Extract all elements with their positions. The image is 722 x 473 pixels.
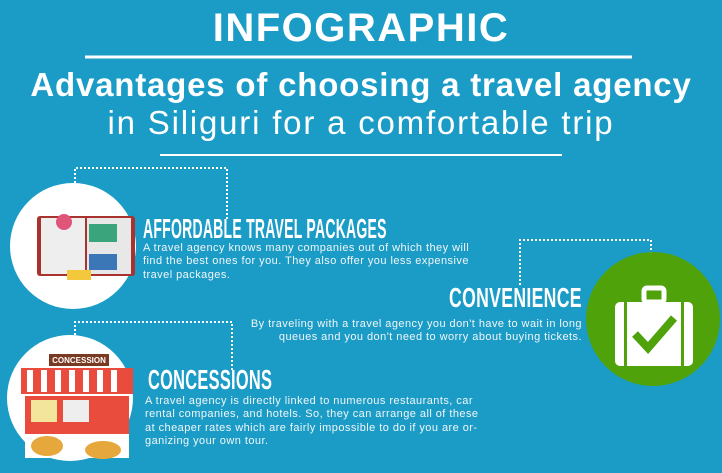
text: affordable: A travel agency knows many companies out of which they will	[143, 242, 469, 254]
text: convenience: By traveling with a travel agency you don't have to wait in long	[251, 318, 582, 330]
subtitle: in Siliguri for a comfortable trip	[108, 104, 614, 141]
icon: concession stand	[7, 335, 133, 461]
text: concessions: rental companies, and hotels. So, they can arrange all of these	[145, 408, 478, 420]
text: affordable: travel packages.	[143, 269, 230, 281]
icon: suitcase check	[586, 252, 720, 386]
text: concessions: A travel agency is directly linked to numerous restaurants, car	[145, 395, 473, 407]
subtitle	[30, 66, 692, 141]
heading: convenience: CONVENIENCE	[449, 282, 582, 313]
icon: concession stand: CONCESSION	[52, 356, 106, 365]
text: concessions: ganizing your own tour.	[145, 435, 268, 447]
heading: affordable: AFFORDABLE TRAVEL PACKAGES	[143, 213, 387, 244]
text: affordable	[143, 242, 469, 281]
heading: concessions: CONCESSIONS	[148, 364, 272, 395]
text: affordable: find the best ones for you. They also offer you less expensive	[143, 255, 469, 267]
text: concessions	[145, 395, 478, 447]
text: concessions: at cheaper rates which are fairly impossible to do if you are or-	[145, 422, 478, 434]
text: convenience	[251, 318, 582, 343]
subtitle: Advantages of choosing a travel agency	[30, 66, 692, 103]
title: INFOGRAPHIC	[213, 6, 509, 50]
icon: travel planner	[10, 183, 136, 309]
text: convenience: queues and you don't need to worry about buying tickets.	[279, 331, 582, 343]
